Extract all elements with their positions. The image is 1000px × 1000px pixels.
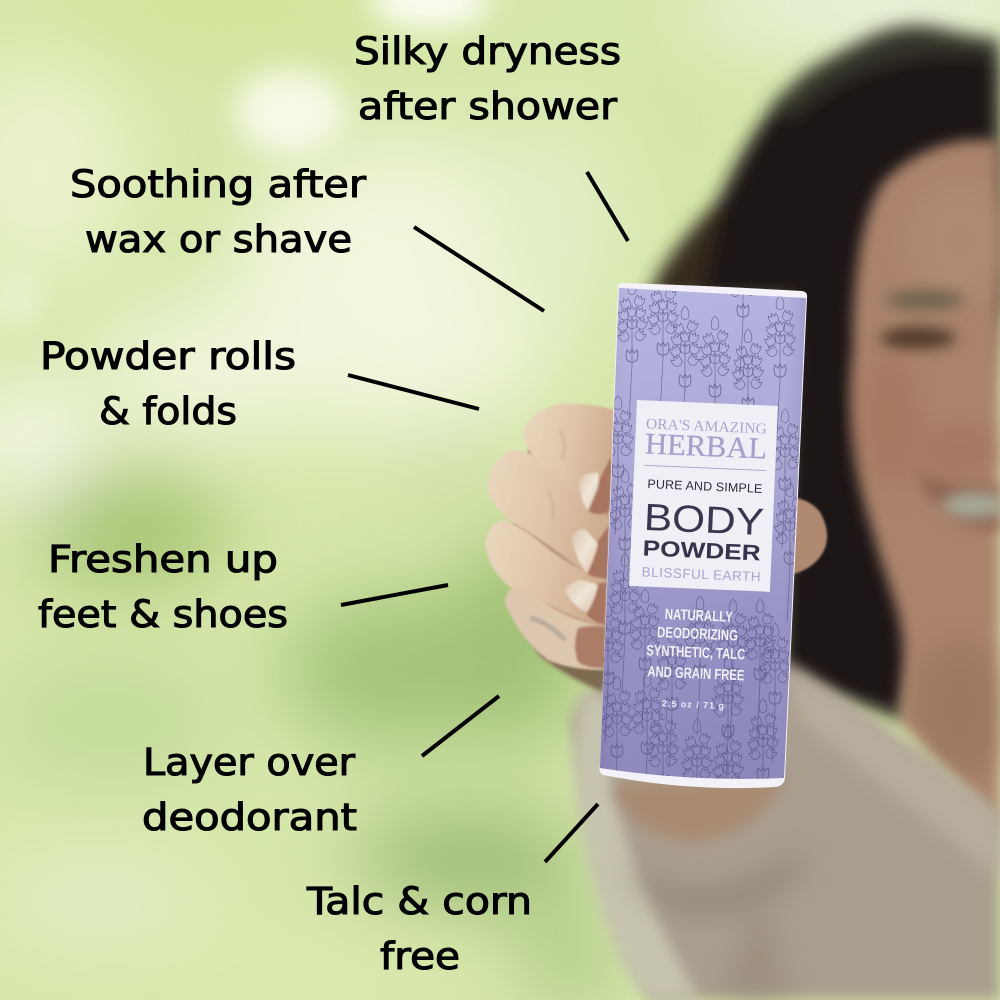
smile: [915, 470, 1000, 530]
thumb behind the tube: [785, 497, 827, 576]
eye and brow: [880, 290, 965, 349]
callout: soothing: Soothing after: [70, 163, 367, 206]
scent: BLISSFUL EARTH: [641, 564, 761, 584]
subtitle: PURE AND SIMPLE: [647, 477, 763, 496]
brand: ORA'S AMAZING: [646, 416, 767, 438]
callout: silky dryness: after shower: [358, 85, 618, 128]
claims: [645, 605, 747, 684]
claims: SYNTHETIC, TALC: [646, 642, 746, 663]
woman: sweater and sleeve: [570, 662, 1000, 1000]
callout: talc and corn free: free: [380, 935, 460, 978]
finger 3: [485, 520, 608, 626]
callout: soothing: [70, 163, 544, 311]
callout: layer over deodorant: [142, 696, 499, 839]
finger 2: [487, 450, 610, 578]
callout: silky dryness: Silky dryness: [354, 30, 621, 73]
hand: fingers gripping the tube: [485, 404, 614, 692]
callout: powder rolls: [40, 335, 479, 433]
callout: layer over deodorant: deodorant: [142, 796, 357, 839]
finger 1: [523, 404, 614, 515]
claims: NATURALLY: [664, 606, 733, 626]
woman: face and neck: [851, 140, 1000, 830]
finger 4: [505, 587, 606, 670]
callout: freshen up: [38, 538, 448, 636]
net weight: 2.5 oz / 71 g: [662, 698, 724, 711]
tube caps: [599, 283, 807, 788]
product: body powder tube: [600, 283, 808, 788]
palm base: [512, 420, 612, 680]
claims: DEODORIZING: [657, 624, 738, 645]
tube shading: [600, 288, 806, 779]
tube wrap: [600, 288, 806, 779]
front label: [624, 400, 778, 713]
hand shadow: [520, 625, 606, 692]
claims: AND GRAIN FREE: [647, 663, 745, 684]
callout: powder rolls: & folds: [99, 390, 237, 433]
front label: POWDER: [642, 535, 761, 565]
product name: BODY: [643, 497, 765, 544]
callout: talc and corn free: [306, 804, 598, 978]
callout: powder rolls: Powder rolls: [40, 335, 296, 378]
callout: silky dryness: [354, 30, 628, 241]
callout: layer over deodorant: Layer over: [143, 741, 356, 784]
callout: talc and corn free: Talc & corn: [306, 880, 532, 923]
callout: freshen up: Freshen up: [48, 538, 278, 581]
front label: HERBAL: [644, 427, 768, 466]
woman: hair: [648, 25, 1000, 720]
callout: soothing: wax or shave: [85, 218, 352, 261]
callout: freshen up: feet & shoes: [38, 593, 288, 636]
lavender pattern: [602, 288, 799, 779]
